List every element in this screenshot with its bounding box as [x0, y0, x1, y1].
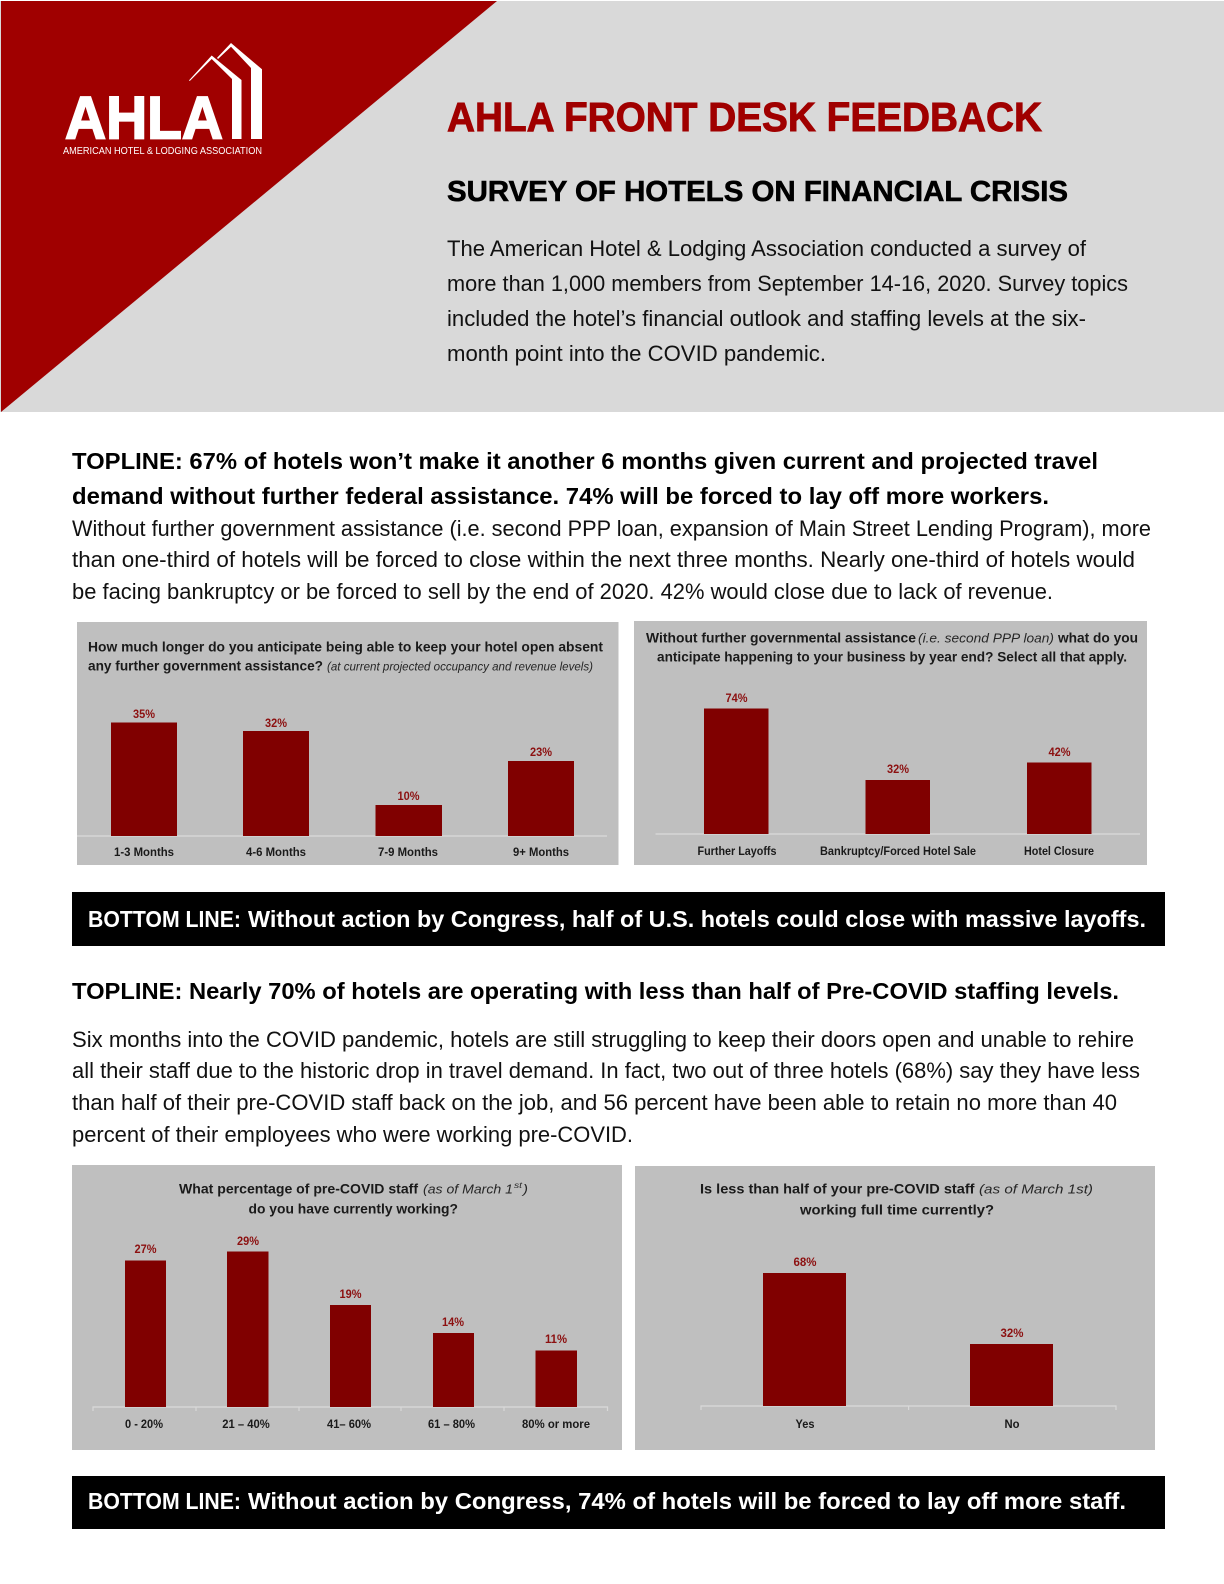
- chart title: (as of March 1st): [979, 1182, 1093, 1196]
- bar: no: [970, 1326, 1053, 1431]
- topline heading 2: TOPLINE: Nearly 70% of hotels are operating with less than half of Pre-COVID staffing levels.: [72, 978, 1119, 1004]
- bar: 4-6 months: [243, 716, 309, 859]
- bar: 21-40%: [222, 1234, 270, 1431]
- topline heading 1: [72, 448, 1098, 509]
- chart title: ): [521, 1182, 528, 1196]
- bar: 80% or more: [522, 1332, 590, 1431]
- body paragraph 2: Six months into the COVID pandemic, hotels are still struggling to keep their doors open and unable to rehire: [72, 1027, 1134, 1052]
- chart title: (at current projected occupancy and revenue levels): [327, 660, 593, 674]
- body paragraph 1: Without further government assistance (i.e. second PPP loan, expansion of Main Street Lending Program), more: [72, 516, 1151, 541]
- panel: percentage of staff chart: [72, 1165, 622, 1450]
- logo: house roof lines: [189, 43, 262, 139]
- bar: hotel closure: 42%: [1048, 745, 1071, 759]
- bar: further layoffs: Further Layoffs: [698, 846, 776, 858]
- bar: 41-60%: [327, 1287, 371, 1431]
- body paragraph 1: [72, 516, 1151, 604]
- bar: 61-80%: 61 – 80%: [428, 1419, 475, 1431]
- bar: bankruptcy or forced sale: Bankruptcy/Forced Hotel Sale: [820, 846, 976, 858]
- chart title: st: [514, 1181, 523, 1190]
- bar: 41-60%: 41– 60%: [327, 1419, 371, 1431]
- logo: AHLA wordmark: AHLA: [65, 84, 223, 152]
- chart title: What percentage of pre-COVID staff: [179, 1182, 419, 1196]
- chart title: Is less than half of your pre-COVID staff: [700, 1182, 975, 1196]
- intro paragraph: [447, 236, 1128, 366]
- bottom line banner 2: Without action by Congress, 74% of hotels will be forced to lay off more staff.: [248, 1488, 1126, 1514]
- bar: yes: 68%: [794, 1255, 817, 1269]
- bar: yes: [763, 1255, 846, 1431]
- topline heading 1: TOPLINE: 67% of hotels won’t make it another 6 months given current and projected travel: [72, 448, 1098, 474]
- panel: anticipated business outcome chart: [634, 621, 1147, 865]
- panel: less than half of staff chart: [635, 1166, 1155, 1450]
- body paragraph 2: than half of their pre-COVID staff back on the job, and 56 percent have been able to retain no more than 40: [72, 1090, 1117, 1115]
- panel: how much longer chart: [77, 622, 618, 865]
- bar: 0-20%: 0 - 20%: [125, 1419, 163, 1431]
- bar: 9+ months: 23%: [530, 745, 552, 759]
- chart title: (i.e. second PPP loan): [918, 630, 1054, 646]
- bar: 0-20%: [125, 1242, 166, 1431]
- bar: 7-9 months: [376, 789, 442, 859]
- chart title: any further government assistance?: [88, 658, 323, 674]
- chart title: what do you: [1057, 630, 1138, 646]
- bottom line banner 1: BOTTOM LINE:: [88, 906, 241, 932]
- bar: 80% or more: 11%: [545, 1332, 567, 1346]
- bar: 61-80%: 14%: [442, 1315, 464, 1329]
- bar: 9+ months: [508, 745, 574, 859]
- bar: 7-9 months: 10%: [398, 789, 420, 803]
- bar: 1-3 months: [111, 707, 177, 859]
- chart title: working full time currently?: [799, 1202, 994, 1218]
- bar: hotel closure: [1024, 745, 1094, 858]
- body paragraph 2: [72, 1027, 1140, 1147]
- body paragraph 1: be facing bankruptcy or be forced to sell by the end of 2020. 42% would close due to lack of revenue.: [72, 579, 1053, 604]
- bar: further layoffs: [698, 691, 776, 858]
- bar: 21-40%: 29%: [237, 1234, 259, 1248]
- bar: 41-60%: 19%: [340, 1287, 362, 1301]
- chart title: [179, 1181, 528, 1216]
- bottom line banner 1: Without action by Congress, half of U.S. hotels could close with massive layoffs.: [248, 906, 1146, 932]
- bar: no: 32%: [1000, 1326, 1024, 1340]
- bar: 1-3 months: 35%: [133, 707, 155, 721]
- bar: 4-6 months: 4-6 Months: [246, 847, 306, 859]
- red diagonal triangle: [1, 1, 497, 412]
- bar: 9+ months: 9+ Months: [513, 847, 569, 859]
- chart title: Without further governmental assistance: [646, 630, 916, 646]
- chart title: [700, 1182, 1093, 1218]
- bar: 80% or more: 80% or more: [522, 1419, 590, 1431]
- bottom line banner 2: [72, 1476, 1165, 1529]
- body paragraph 2: all their staff due to the historic drop in travel demand. In fact, two out of three hotels (68%) say they have less: [72, 1058, 1140, 1083]
- bar: 21-40%: 21 – 40%: [222, 1419, 270, 1431]
- bottom line banner 1: [72, 892, 1165, 946]
- bar: further layoffs: 74%: [726, 691, 748, 705]
- intro paragraph: The American Hotel & Lodging Association conducted a survey of: [447, 236, 1087, 261]
- chart title: anticipate happening to your business by year end? Select all that apply.: [657, 650, 1127, 664]
- bottom line banner 2: BOTTOM LINE:: [88, 1488, 241, 1514]
- intro paragraph: included the hotel’s financial outlook and staffing levels at the six-: [447, 306, 1086, 331]
- chart title: (as of March 1: [423, 1182, 513, 1196]
- topline heading 1: demand without further federal assistance. 74% will be forced to lay off more workers.: [72, 483, 1049, 509]
- chart title: How much longer do you anticipate being able to keep your hotel open absent: [88, 640, 604, 654]
- intro paragraph: month point into the COVID pandemic.: [447, 341, 826, 366]
- header band: [0, 1, 1224, 412]
- chart title: do you have currently working?: [248, 1202, 458, 1216]
- body paragraph 2: percent of their employees who were working pre-COVID.: [72, 1122, 633, 1147]
- AHLA logo: [63, 43, 262, 157]
- title: AHLA FRONT DESK FEEDBACK: [447, 94, 1042, 140]
- bar: bankruptcy or forced sale: 32%: [887, 762, 909, 776]
- chart title: [646, 630, 1138, 664]
- subtitle: SURVEY OF HOTELS ON FINANCIAL CRISIS: [447, 176, 1068, 208]
- bar: bankruptcy or forced sale: [820, 762, 976, 858]
- logo: association name: AMERICAN HOTEL & LODGING ASSOCIATION: [63, 146, 262, 157]
- intro paragraph: more than 1,000 members from September 14-16, 2020. Survey topics: [447, 271, 1128, 296]
- chart title: [88, 640, 604, 674]
- bar: 61-80%: [428, 1315, 475, 1431]
- bar: hotel closure: Hotel Closure: [1024, 846, 1094, 858]
- bar: 7-9 months: 7-9 Months: [378, 847, 438, 859]
- body paragraph 1: than one-third of hotels will be forced to close within the next three months. Nearly one-third of hotels would: [72, 547, 1135, 572]
- bar: yes: Yes: [796, 1419, 814, 1431]
- bar: 4-6 months: 32%: [265, 716, 287, 730]
- bar: 1-3 months: 1-3 Months: [114, 847, 174, 859]
- bar: no: No: [1004, 1419, 1020, 1431]
- bar: 0-20%: 27%: [134, 1242, 157, 1256]
